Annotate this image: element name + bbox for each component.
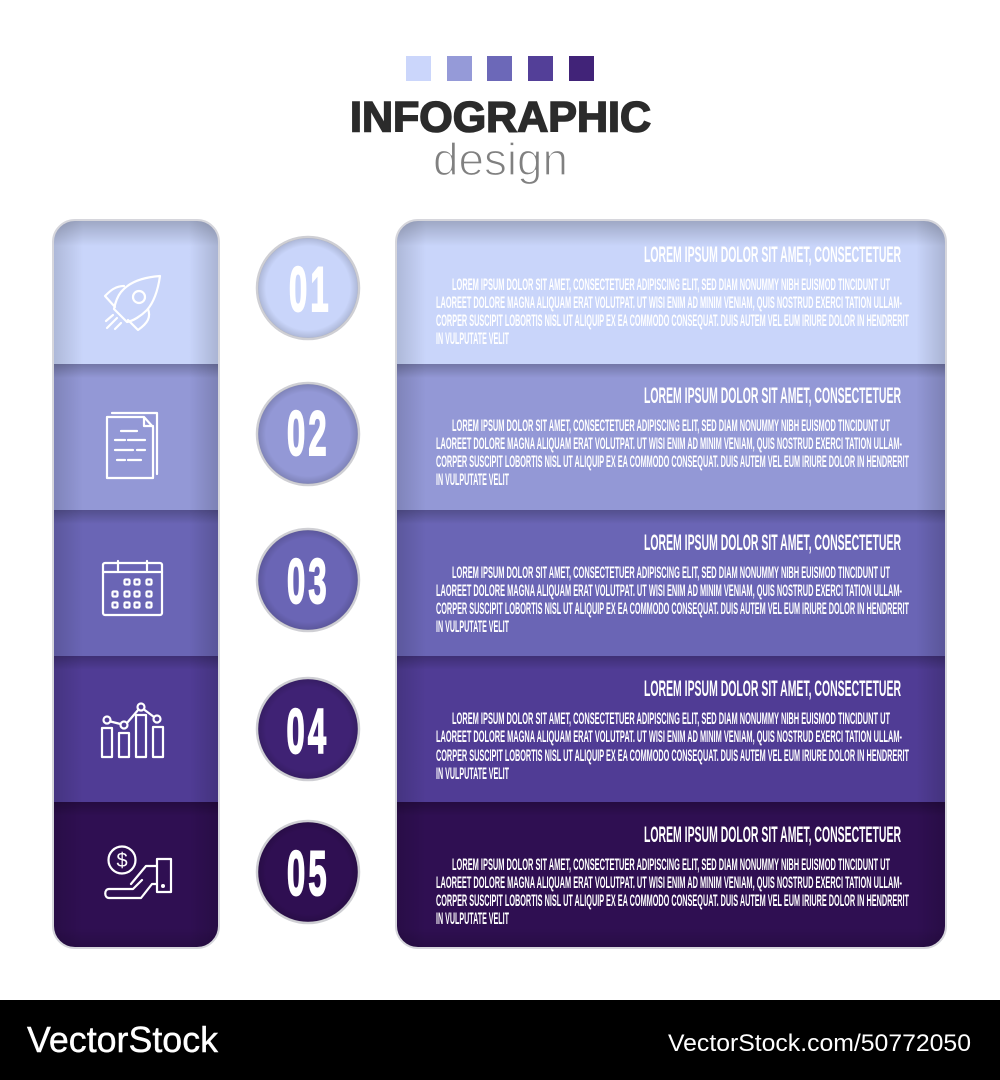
text block 5 [436, 822, 909, 928]
panel: left icon column [53, 220, 219, 948]
number badge 05: 05 [287, 839, 330, 909]
panel: right text column [396, 220, 946, 948]
icon: hand with coin [105, 846, 171, 898]
number badge 01: 01 [289, 255, 332, 325]
number badge 02 [257, 383, 359, 485]
text block 3: IN VULPUTATE VELIT [436, 618, 509, 636]
icon: documents [107, 413, 157, 478]
subtitle: design [433, 134, 568, 185]
text block 2 [436, 383, 909, 489]
text block 5: IN VULPUTATE VELIT [436, 910, 509, 928]
number badge 03 [257, 529, 359, 631]
text block 1: IN VULPUTATE VELIT [436, 330, 509, 348]
text block 3 [436, 530, 909, 636]
icon: hand with coin: $ [116, 850, 128, 872]
text block 4: IN VULPUTATE VELIT [436, 765, 509, 783]
number badge 05 [257, 821, 359, 923]
number badge 04 [257, 678, 359, 780]
number badge 01 [257, 237, 359, 339]
footer bar [0, 1000, 1000, 1080]
icon: calendar [103, 561, 162, 615]
text block 2: IN VULPUTATE VELIT [436, 471, 509, 489]
icon: bar and line chart [102, 704, 163, 757]
number badge 02: 02 [287, 399, 330, 469]
footer image id: VectorStock.com/50772050 [668, 1030, 971, 1057]
icon: rocket [105, 276, 160, 330]
text block 4 [436, 676, 909, 783]
footer brand: VectorStock [27, 1019, 219, 1060]
number badge 04: 04 [286, 697, 329, 767]
header: colour swatches [406, 56, 594, 81]
number badge 03: 03 [287, 547, 330, 617]
title: INFOGRAPHIC [350, 94, 651, 142]
text block 1 [436, 242, 909, 348]
